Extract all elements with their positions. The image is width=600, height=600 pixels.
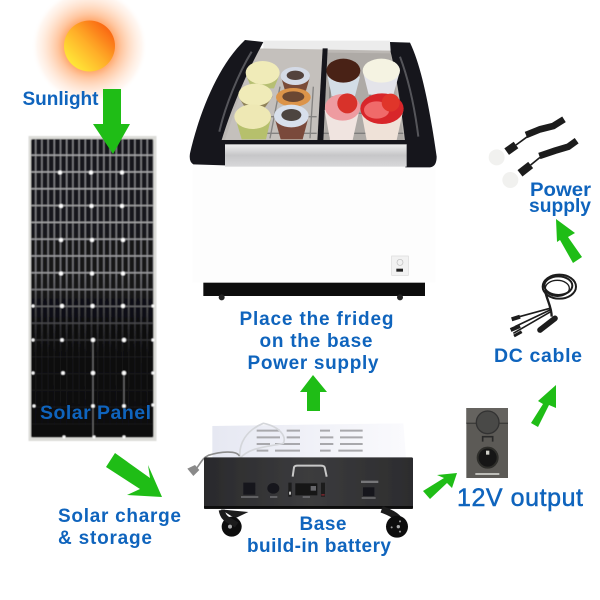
label: Base build-in battery: build-in battery (247, 536, 391, 557)
fridge body (193, 164, 435, 283)
right frame (390, 42, 437, 167)
label: Power supply: supply (529, 196, 591, 217)
ice cream tubs (234, 59, 404, 140)
battery base (187, 423, 413, 538)
fridge plinth (203, 283, 425, 300)
wire shelf (240, 87, 403, 138)
label: place the fridge: on the base (260, 331, 372, 352)
left frame (190, 40, 263, 165)
fridge switch (392, 256, 408, 275)
label: Base build-in battery: Base (300, 514, 346, 535)
arrow: base to 12V output (423, 473, 457, 499)
arrow: sunlight down to panel (93, 89, 130, 154)
arrow: 12V output to DC cable (531, 385, 556, 427)
power cord and plug (187, 452, 239, 476)
label: place the fridge (240, 309, 394, 374)
fridge lid interior (220, 48, 410, 143)
label: Solar Panel: Solar Panel (40, 402, 151, 424)
icon: light bulbs (489, 119, 577, 188)
arrow: panel to base (106, 453, 162, 497)
label: place the fridge: Power supply (248, 353, 379, 374)
display (288, 483, 325, 497)
fridge (190, 40, 437, 300)
left caster (221, 509, 248, 537)
arrow: base up to fridge (300, 375, 327, 411)
label: Power supply: Power (530, 179, 591, 201)
silver front band (225, 144, 407, 167)
label: 12V output: 12V output (457, 484, 583, 512)
label: Sunlight: Sunlight (22, 89, 99, 110)
label: DC cable: DC cable (494, 345, 582, 367)
icon: DC cable (511, 275, 576, 336)
label: Solar charge & storage (58, 506, 181, 549)
label: Solar charge & storage: Solar charge (58, 506, 181, 527)
label: Solar charge & storage: & storage (58, 528, 152, 549)
right caster (382, 509, 408, 538)
fridge top rail (263, 41, 390, 51)
fridge back behind base (212, 423, 406, 458)
handle (293, 466, 327, 477)
icon: sun (32, 0, 148, 104)
ports (243, 483, 374, 496)
label: Power supply (529, 179, 591, 217)
lid divider (317, 48, 328, 142)
arrow: DC cable to power supply (556, 219, 582, 263)
12V output socket panel (466, 408, 508, 478)
label: place the fridge: Place the frideg (240, 309, 394, 330)
label: Base build-in battery (247, 514, 391, 557)
battery case (204, 457, 413, 509)
port labels (241, 481, 378, 499)
frame highlights (219, 52, 252, 132)
solar panel (28, 136, 156, 441)
